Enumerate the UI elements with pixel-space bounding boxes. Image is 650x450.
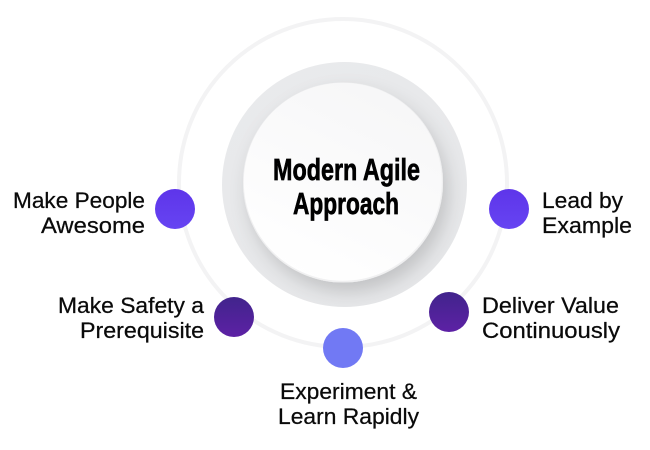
hub disc face xyxy=(244,83,442,281)
label: Make People xyxy=(13,188,145,213)
label xyxy=(542,188,632,238)
dot xyxy=(214,297,254,337)
label: Make Safety a xyxy=(58,293,205,318)
dot xyxy=(155,189,195,229)
label: Lead by xyxy=(542,188,623,213)
label: Learn Rapidly xyxy=(278,404,419,429)
label xyxy=(58,293,205,343)
central hub xyxy=(222,62,467,307)
outer ring xyxy=(179,19,507,347)
label: Prerequisite xyxy=(80,318,204,343)
hub disc xyxy=(243,82,443,282)
label xyxy=(13,188,145,238)
hub halo xyxy=(222,62,467,307)
node: Experiment and Learn Rapidly xyxy=(278,328,419,429)
node: Deliver Value Continuously xyxy=(429,292,620,343)
dot xyxy=(323,328,363,368)
label: Continuously xyxy=(482,318,620,343)
label: Awesome xyxy=(41,213,145,238)
title: Approach xyxy=(293,186,399,221)
dot xyxy=(429,292,469,332)
node: Make Safety a Prerequisite xyxy=(58,293,254,343)
title xyxy=(273,152,420,221)
title: Modern Agile xyxy=(273,152,420,187)
node: Make People Awesome xyxy=(13,188,195,238)
node: Lead by Example xyxy=(489,188,632,238)
label xyxy=(482,293,620,343)
dot xyxy=(489,189,529,229)
label xyxy=(278,379,419,429)
label: Example xyxy=(542,213,632,238)
label: Deliver Value xyxy=(482,293,619,318)
label: Experiment & xyxy=(280,379,417,404)
